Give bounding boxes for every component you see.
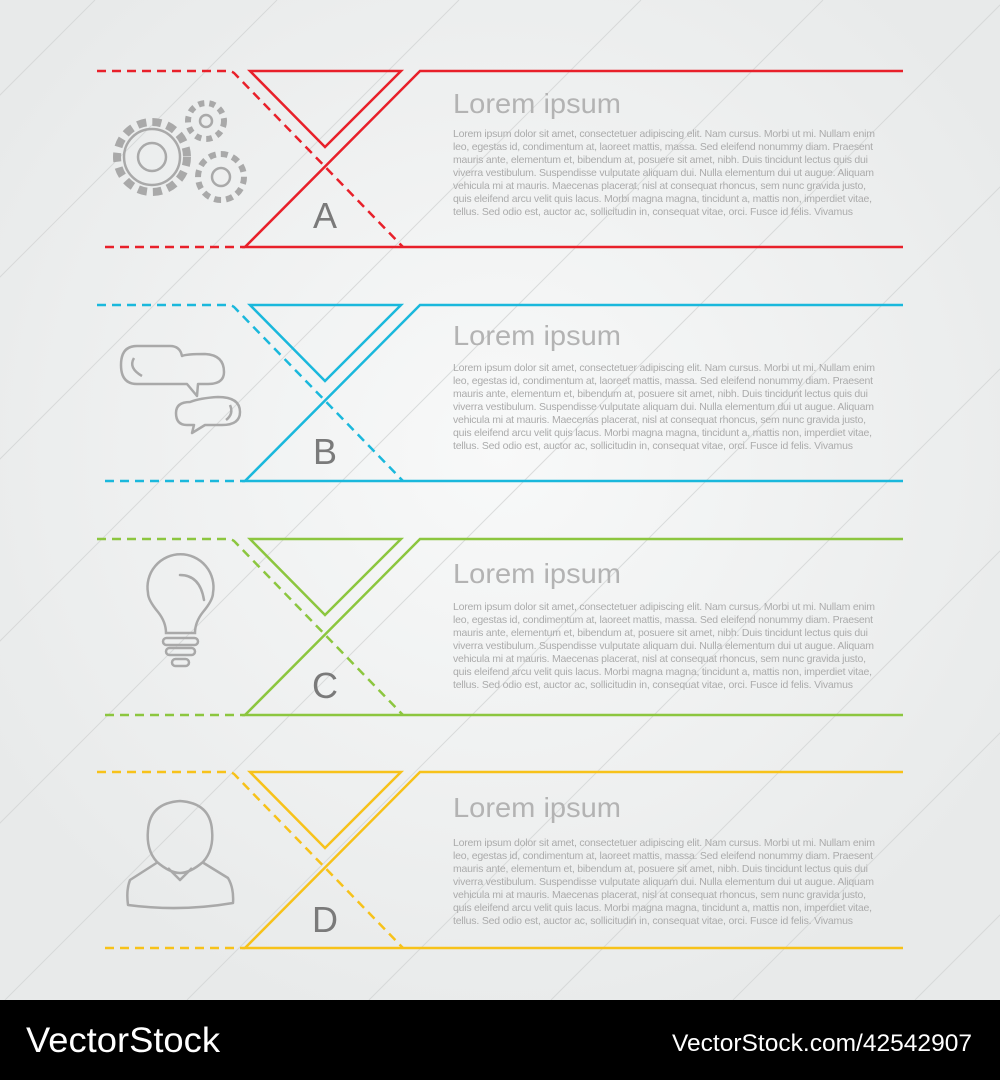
block D: yellow: Lorem ipsum dolor sit amet, consectetuer adipiscing elit. Nam cursus. Morbi ut mi. Nullam enim <box>453 837 875 849</box>
block B: cyan: B <box>313 431 337 472</box>
block D: yellow: viverra vestibulum. Suspendisse vulputate aliquam dui. Nulla elementum dui ut augue. Aliquam <box>453 876 874 888</box>
block A: red: mauris ante, elementum et, bibendum at, posuere sit amet, nibh. Duis tincidunt lectus quis dui <box>453 154 868 166</box>
block A: red: vehicula mi at mauris. Maecenas placerat, nisl at consequat rhoncus, sem nunc gravida justo, <box>453 180 866 192</box>
block A: red <box>97 71 903 247</box>
block C: green: viverra vestibulum. Suspendisse vulputate aliquam dui. Nulla elementum dui ut augue. Aliquam <box>453 640 874 652</box>
footer bar <box>0 1000 1000 1080</box>
block B: cyan <box>97 305 903 481</box>
block A: red: tellus. Sed odio est, auctor ac, sollicitudin in, consequat vitae, orci. Fusce id felis. Vivamus <box>453 206 853 218</box>
icon: speech bubbles <box>121 346 240 433</box>
block C: green: quis eleifend arcu velit quis lacus. Morbi magna magna, tincidunt a, mattis non, imperdiet vitae, <box>453 666 872 678</box>
block A: red: viverra vestibulum. Suspendisse vulputate aliquam dui. Nulla elementum dui ut augue. Aliquam <box>453 167 874 179</box>
block B: cyan: viverra vestibulum. Suspendisse vulputate aliquam dui. Nulla elementum dui ut augue. Aliquam <box>453 401 874 413</box>
block A: red: Lorem ipsum <box>453 88 621 119</box>
block C: green <box>97 539 903 715</box>
block B: cyan: mauris ante, elementum et, bibendum at, posuere sit amet, nibh. Duis tincidunt lectus quis dui <box>453 388 868 400</box>
block A: red: Lorem ipsum dolor sit amet, consectetuer adipiscing elit. Nam cursus. Morbi ut mi. Nullam enim <box>453 128 875 140</box>
block D: yellow: Lorem ipsum <box>453 792 621 823</box>
block A: red: leo, egestas id, condimentum at, laoreet mattis, massa. Sed eleifend nonummy diam. Praesent <box>453 141 873 153</box>
block D: yellow: mauris ante, elementum et, bibendum at, posuere sit amet, nibh. Duis tincidunt lectus quis dui <box>453 863 868 875</box>
block B: cyan: tellus. Sed odio est, auctor ac, sollicitudin in, consequat vitae, orci. Fusce id felis. Vivamus <box>453 440 853 452</box>
block A: red: quis eleifend arcu velit quis lacus. Morbi magna magna, tincidunt a, mattis non, imperdiet vitae, <box>453 193 872 205</box>
block B: cyan: Lorem ipsum dolor sit amet, consectetuer adipiscing elit. Nam cursus. Morbi ut mi. Nullam enim <box>453 362 875 374</box>
block C: green: C <box>312 665 338 706</box>
block C: green: Lorem ipsum <box>453 558 621 589</box>
block B: cyan: Lorem ipsum <box>453 320 621 351</box>
block C: green: leo, egestas id, condimentum at, laoreet mattis, massa. Sed eleifend nonummy diam. Praesent <box>453 614 873 626</box>
block C: green: mauris ante, elementum et, bibendum at, posuere sit amet, nibh. Duis tincidunt lectus quis dui <box>453 627 868 639</box>
block D: yellow: quis eleifend arcu velit quis lacus. Morbi magna magna, tincidunt a, mattis non, imperdiet vitae, <box>453 902 872 914</box>
block C: green: vehicula mi at mauris. Maecenas placerat, nisl at consequat rhoncus, sem nunc gravida justo, <box>453 653 866 665</box>
footer logo text: VectorStock <box>26 1021 221 1060</box>
footer url text: VectorStock.com/42542907 <box>672 1030 972 1057</box>
icon: light bulb <box>148 554 213 666</box>
block C: green: tellus. Sed odio est, auctor ac, sollicitudin in, consequat vitae, orci. Fusce id felis. Vivamus <box>453 679 853 691</box>
block B: cyan: leo, egestas id, condimentum at, laoreet mattis, massa. Sed eleifend nonummy diam. Praesent <box>453 375 873 387</box>
block A: red: A <box>313 195 337 236</box>
block B: cyan: vehicula mi at mauris. Maecenas placerat, nisl at consequat rhoncus, sem nunc gravida justo, <box>453 414 866 426</box>
block B: cyan: quis eleifend arcu velit quis lacus. Morbi magna magna, tincidunt a, mattis non, imperdiet vitae, <box>453 427 872 439</box>
block D: yellow: D <box>312 899 338 940</box>
block D: yellow: leo, egestas id, condimentum at, laoreet mattis, massa. Sed eleifend nonummy diam. Praesent <box>453 850 873 862</box>
block D: yellow: vehicula mi at mauris. Maecenas placerat, nisl at consequat rhoncus, sem nunc gravida justo, <box>453 889 866 901</box>
block C: green: Lorem ipsum dolor sit amet, consectetuer adipiscing elit. Nam cursus. Morbi ut mi. Nullam enim <box>453 601 875 613</box>
block D: yellow <box>97 772 903 948</box>
icon: person <box>127 801 233 908</box>
icon: gears <box>117 103 244 200</box>
block D: yellow: tellus. Sed odio est, auctor ac, sollicitudin in, consequat vitae, orci. Fusce id felis. Vivamus <box>453 915 853 927</box>
